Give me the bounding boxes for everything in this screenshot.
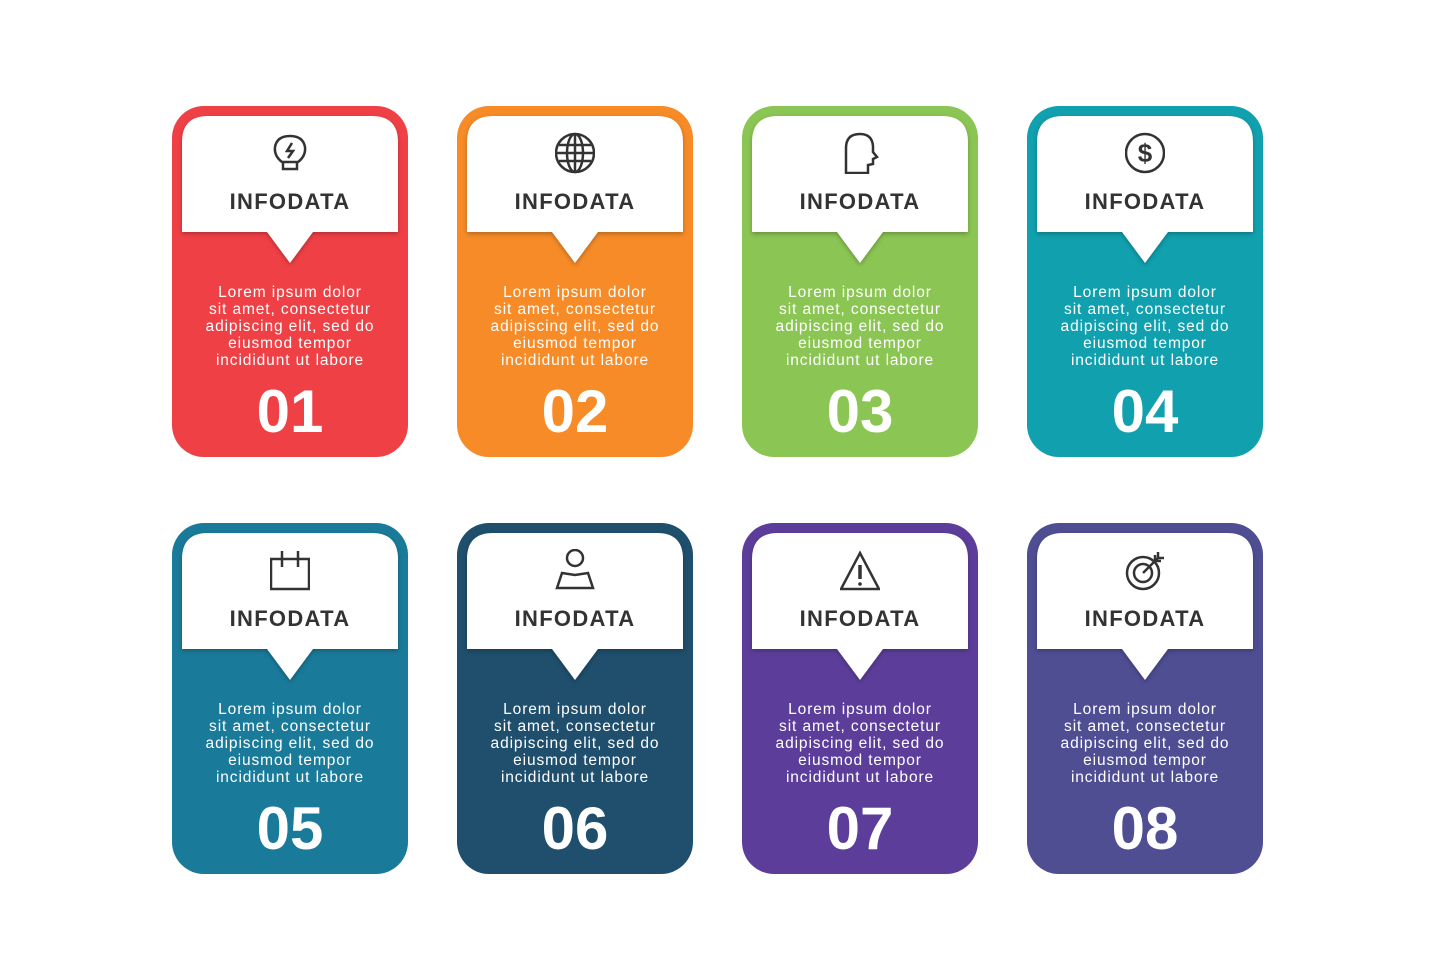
card 08 — [1027, 523, 1263, 874]
text: eiusmod tempor — [228, 335, 352, 352]
text — [491, 284, 659, 369]
card 01 — [172, 106, 408, 457]
heading: INFODATA — [1085, 606, 1205, 631]
text: eiusmod tempor — [1083, 752, 1207, 769]
icon: light bulb — [274, 134, 306, 170]
icon: user map — [555, 549, 595, 590]
card 07 — [742, 523, 978, 874]
text: sit amet, consectetur — [494, 301, 656, 318]
text: incididunt ut labore — [216, 352, 364, 369]
text: adipiscing elit, sed do — [206, 735, 374, 752]
text: adipiscing elit, sed do — [206, 318, 374, 335]
icon: calendar — [270, 551, 310, 590]
heading: INFODATA — [230, 606, 350, 631]
text: eiusmod tempor — [513, 335, 637, 352]
text — [776, 701, 944, 786]
text: adipiscing elit, sed do — [491, 735, 659, 752]
number: 01 — [257, 378, 323, 445]
text: Lorem ipsum dolor — [788, 701, 932, 718]
text: incididunt ut labore — [501, 352, 649, 369]
text: incididunt ut labore — [786, 769, 934, 786]
number: 06 — [542, 795, 608, 862]
text: Lorem ipsum dolor — [1073, 701, 1217, 718]
number: 02 — [542, 378, 608, 445]
text: sit amet, consectetur — [209, 718, 371, 735]
icon: warning — [840, 550, 880, 590]
text — [491, 701, 659, 786]
card 06 — [457, 523, 693, 874]
icon: head — [844, 132, 879, 174]
icon: target — [1126, 552, 1164, 590]
text — [1061, 284, 1229, 369]
card 02 — [457, 106, 693, 457]
text: incididunt ut labore — [216, 769, 364, 786]
card 04 — [1027, 106, 1263, 457]
text: eiusmod tempor — [228, 752, 352, 769]
number: 03 — [827, 378, 893, 445]
text: eiusmod tempor — [798, 335, 922, 352]
text: Lorem ipsum dolor — [503, 701, 647, 718]
text: Lorem ipsum dolor — [218, 284, 362, 301]
text: sit amet, consectetur — [1064, 301, 1226, 318]
text: incididunt ut labore — [1071, 769, 1219, 786]
number: 08 — [1112, 795, 1178, 862]
text: adipiscing elit, sed do — [1061, 318, 1229, 335]
heading: INFODATA — [230, 189, 350, 214]
heading: INFODATA — [800, 606, 920, 631]
text — [206, 701, 374, 786]
heading: INFODATA — [1085, 189, 1205, 214]
icon: dollar — [1125, 132, 1165, 174]
text: eiusmod tempor — [798, 752, 922, 769]
text — [206, 284, 374, 369]
text: Lorem ipsum dolor — [218, 701, 362, 718]
text: sit amet, consectetur — [494, 718, 656, 735]
heading: INFODATA — [515, 189, 635, 214]
number: 05 — [257, 795, 323, 862]
number: 04 — [1112, 378, 1178, 445]
card 05 — [172, 523, 408, 874]
text — [776, 284, 944, 369]
card 03 — [742, 106, 978, 457]
text: incididunt ut labore — [501, 769, 649, 786]
text: eiusmod tempor — [1083, 335, 1207, 352]
icon: globe — [555, 132, 595, 174]
text — [1061, 701, 1229, 786]
text: sit amet, consectetur — [1064, 718, 1226, 735]
text: adipiscing elit, sed do — [491, 318, 659, 335]
text: Lorem ipsum dolor — [788, 284, 932, 301]
text: adipiscing elit, sed do — [1061, 735, 1229, 752]
heading: INFODATA — [800, 189, 920, 214]
text: sit amet, consectetur — [779, 718, 941, 735]
text: Lorem ipsum dolor — [1073, 284, 1217, 301]
text: incididunt ut labore — [1071, 352, 1219, 369]
icon: dollar: $ — [1138, 138, 1153, 168]
text: adipiscing elit, sed do — [776, 735, 944, 752]
text: sit amet, consectetur — [779, 301, 941, 318]
text: sit amet, consectetur — [209, 301, 371, 318]
text: incididunt ut labore — [786, 352, 934, 369]
text: eiusmod tempor — [513, 752, 637, 769]
heading: INFODATA — [515, 606, 635, 631]
text: Lorem ipsum dolor — [503, 284, 647, 301]
text: adipiscing elit, sed do — [776, 318, 944, 335]
number: 07 — [827, 795, 893, 862]
